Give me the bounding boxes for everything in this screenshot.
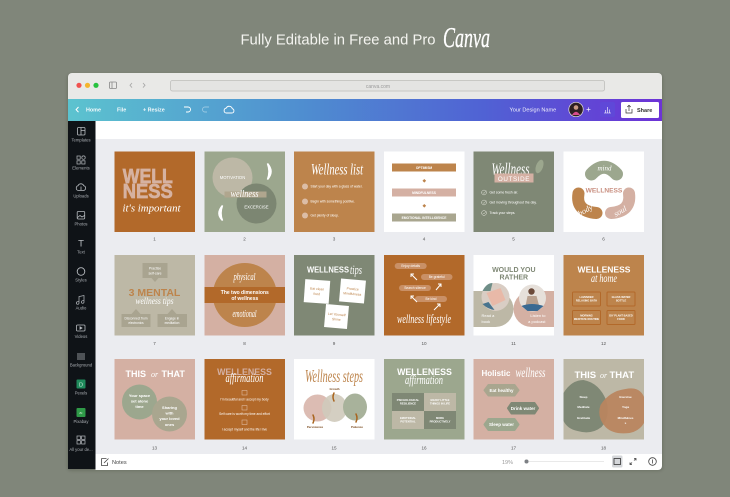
sidebar labels: Background bbox=[70, 362, 93, 368]
heading bbox=[492, 267, 536, 282]
box labels: DIY PLANT BASED bbox=[609, 314, 633, 318]
brown marks bbox=[313, 393, 357, 423]
toolbar labels: Home bbox=[86, 108, 101, 114]
card 18 number: 18 bbox=[601, 446, 606, 450]
center word: WELLNESS bbox=[586, 188, 623, 194]
grid labels: PSICHOLOGICAL bbox=[397, 398, 420, 402]
motivation circle: MOTIVATION bbox=[220, 175, 245, 180]
card 8 number: 8 bbox=[243, 341, 246, 346]
script word: tips bbox=[350, 262, 362, 277]
dot bbox=[422, 204, 426, 208]
toolbar labels: + Resize bbox=[143, 108, 165, 114]
sidebar labels: Templates bbox=[71, 138, 91, 142]
card 9 number: 9 bbox=[333, 341, 336, 346]
circle right: ones bbox=[165, 422, 175, 427]
box labels: RELAXING BATH bbox=[576, 298, 597, 302]
card 16 number: 16 bbox=[421, 446, 427, 450]
icon: styles bbox=[77, 268, 85, 275]
design name: Your Design Name bbox=[510, 108, 556, 114]
body arc: body bbox=[576, 202, 595, 218]
card 7 number: 7 bbox=[153, 341, 156, 346]
left callout: Disconnect from bbox=[124, 316, 148, 320]
heading: THAT bbox=[162, 369, 185, 379]
blob green bbox=[343, 394, 367, 420]
check boxes bbox=[242, 390, 247, 424]
sidebar labels: All your de... bbox=[69, 447, 93, 452]
footer bar bbox=[96, 454, 662, 470]
card 17 number: 17 bbox=[511, 446, 516, 450]
script title: wellness lifestyle bbox=[397, 311, 451, 326]
blob beige bbox=[322, 394, 347, 422]
leaf bbox=[534, 159, 545, 174]
dot bbox=[422, 179, 426, 183]
card 10 number: 10 bbox=[421, 341, 427, 346]
left sidebar bbox=[68, 121, 96, 469]
script line: it's important bbox=[122, 202, 181, 214]
heading: WELLNESS bbox=[307, 266, 350, 274]
grid labels: THINGS IN LIFE bbox=[430, 402, 450, 406]
card 15: wellness steps bbox=[294, 359, 374, 440]
pill labels: Be kind bbox=[426, 297, 437, 301]
right list: Exercise bbox=[619, 395, 632, 399]
book photo bbox=[482, 283, 510, 311]
icon: pixabay: a: bbox=[79, 410, 83, 415]
note 3: Let Yourself bbox=[328, 312, 346, 317]
card 3 number: 3 bbox=[333, 236, 336, 242]
mindfulness bar: MINDFULNESS bbox=[412, 191, 437, 195]
icon: pexels: D bbox=[79, 382, 83, 388]
sidebar labels: Videos bbox=[75, 334, 87, 339]
toolbar labels bbox=[86, 108, 165, 114]
beige shape bbox=[474, 291, 514, 327]
left list: Gratitude bbox=[577, 416, 590, 420]
pill labels: Be grateful bbox=[429, 275, 445, 279]
left list bbox=[577, 395, 590, 420]
right label: a podcast bbox=[528, 319, 546, 324]
card 6: mind body soul bbox=[564, 152, 644, 232]
heading: Holistic bbox=[482, 369, 511, 378]
sidebar labels: Photos bbox=[74, 222, 88, 226]
grid labels: RESILIENCE bbox=[400, 402, 416, 406]
pill labels: Search silence bbox=[404, 286, 426, 290]
pill: eat healthy: Eat healthy bbox=[489, 388, 514, 393]
toolbar labels: File bbox=[117, 108, 126, 114]
icon: photos bbox=[77, 212, 85, 219]
affirmations: I'm beautiful and I accept my body bbox=[220, 398, 269, 402]
card 1 number: 1 bbox=[153, 236, 156, 242]
card 8: two dimensions bbox=[204, 255, 285, 336]
script subheading: wellness tips bbox=[136, 297, 174, 307]
card 10: wellness lifestyle bbox=[384, 255, 464, 336]
card 15 number: 15 bbox=[331, 446, 337, 450]
checklist: Get moving throughout the day. bbox=[490, 201, 537, 205]
checklist bbox=[482, 190, 537, 215]
right callout: meditation bbox=[165, 321, 180, 325]
right list: s bbox=[625, 421, 627, 425]
script title: Wellness steps bbox=[305, 366, 363, 386]
back and forward arrows bbox=[130, 83, 145, 88]
sidebar toggle icon bbox=[110, 82, 116, 88]
sidebar labels bbox=[69, 138, 93, 452]
circle left bbox=[122, 384, 157, 420]
left blob bbox=[564, 380, 608, 432]
exercise circle: EXCERCISE bbox=[244, 204, 269, 210]
card 16: welleness affirmation grid bbox=[384, 359, 464, 440]
note 3 bbox=[324, 304, 349, 329]
card 14 number: 14 bbox=[242, 446, 247, 450]
box labels bbox=[574, 295, 633, 321]
avatar bbox=[569, 102, 583, 117]
card 13: this or that bbox=[114, 359, 195, 440]
right blob bbox=[599, 388, 644, 433]
heading: WELLENESS bbox=[217, 367, 272, 377]
top callout: Practise bbox=[149, 266, 161, 270]
box labels: MORNING bbox=[580, 314, 593, 318]
card 12 number: 12 bbox=[601, 341, 606, 346]
affirmations: I accept myself and the life I live bbox=[222, 428, 267, 432]
soul arc: soul bbox=[612, 204, 629, 219]
white crescents bbox=[219, 164, 271, 220]
cloud save icon bbox=[224, 106, 234, 113]
card 1: wellness it's important bbox=[114, 152, 195, 232]
circle right: with bbox=[164, 410, 174, 416]
boxes bbox=[572, 292, 635, 324]
card 18: this or that venn bbox=[564, 359, 644, 440]
pill labels: Enjoy details bbox=[401, 264, 420, 268]
heading: WELLENESS bbox=[397, 367, 452, 377]
list item 2: Begin with something positive. bbox=[310, 200, 355, 204]
pink shape bbox=[514, 291, 554, 327]
growth label: Growth bbox=[329, 387, 340, 391]
note 2: Mindfulness bbox=[343, 291, 362, 297]
note 1 bbox=[304, 279, 330, 304]
card 6 number: 6 bbox=[602, 236, 605, 242]
grid labels: ENJOY LITTLE bbox=[431, 398, 450, 402]
circle left: set alone bbox=[131, 398, 149, 404]
left callout bbox=[122, 309, 150, 327]
editor window bbox=[68, 73, 662, 470]
heading: 3 MENTAL bbox=[129, 287, 181, 299]
insights button bbox=[600, 102, 615, 117]
grid labels bbox=[397, 398, 451, 424]
band bbox=[204, 287, 285, 303]
top callout: self-care bbox=[148, 272, 162, 276]
right callout: Engage in bbox=[165, 316, 179, 320]
card 2: motivation exercise bbox=[204, 152, 285, 232]
address bar bbox=[170, 80, 604, 91]
grid bbox=[392, 393, 456, 429]
band: The two dimensions bbox=[221, 290, 269, 296]
grid labels: PRODUCTIVELY bbox=[430, 420, 451, 424]
right list: Mindfulnes bbox=[618, 416, 634, 420]
address bar: canva.com bbox=[366, 84, 390, 90]
notes label: Notes bbox=[112, 460, 127, 466]
icon: pixabay bbox=[76, 408, 86, 417]
box labels: FOOD bbox=[617, 317, 625, 321]
checklist: Track your steps. bbox=[490, 211, 515, 215]
fullscreen icon bbox=[630, 458, 636, 464]
right list bbox=[618, 395, 634, 425]
checklist: Get some fresh air. bbox=[490, 191, 518, 195]
note 1: Eat clean bbox=[310, 287, 324, 292]
card 4: three bars bbox=[384, 152, 464, 232]
canvas background bbox=[95, 139, 662, 454]
band: of wellness bbox=[231, 296, 258, 302]
script word: at home bbox=[591, 271, 617, 285]
heading: WOULD YOU bbox=[492, 267, 536, 274]
pill: sleep water: Sleep water bbox=[489, 422, 514, 427]
list item 1: Start your day with a glass of water. bbox=[310, 185, 363, 189]
heading: THIS bbox=[574, 370, 596, 381]
note 2: Practice bbox=[346, 286, 359, 292]
right list: Yoga bbox=[622, 405, 629, 409]
circle right bbox=[152, 396, 187, 432]
list item 3: Get plenty of sleep. bbox=[310, 214, 339, 218]
grid labels: POTENTIAL bbox=[400, 420, 416, 424]
headline: Canva bbox=[443, 22, 490, 54]
sidebar labels: Elements bbox=[72, 166, 90, 170]
icon: videos bbox=[76, 325, 85, 331]
heading: WELLENESS bbox=[578, 264, 631, 274]
card 13 number: 13 bbox=[152, 446, 157, 450]
heading bbox=[126, 369, 185, 379]
or script: or bbox=[600, 371, 608, 380]
zoom percent: 19% bbox=[502, 460, 513, 466]
left label bbox=[482, 313, 495, 324]
share button: Share bbox=[637, 108, 652, 114]
icon: audio bbox=[76, 296, 84, 304]
window shadow bbox=[67, 74, 663, 471]
card 5 number: 5 bbox=[512, 236, 515, 242]
circle left: time bbox=[135, 404, 144, 409]
left label: Read a bbox=[482, 313, 495, 318]
circle left: Your space bbox=[129, 393, 151, 398]
sidebar labels: Uploads bbox=[73, 194, 89, 198]
grid labels: EMOTIONAL bbox=[400, 416, 416, 420]
right label: Listen to bbox=[530, 313, 546, 318]
left label: book bbox=[482, 319, 490, 324]
card 5: wellness outside bbox=[474, 152, 554, 232]
pill labels bbox=[401, 264, 445, 301]
big word bbox=[123, 166, 173, 203]
script title: Wellness list bbox=[311, 162, 363, 178]
arrows bbox=[411, 274, 441, 310]
blob pink bbox=[304, 394, 332, 422]
emotional script: emotional bbox=[232, 308, 256, 320]
circle right: your loved bbox=[159, 416, 180, 421]
share button bbox=[621, 102, 659, 118]
persistence label: Persistence bbox=[307, 425, 324, 429]
script word: wellness bbox=[230, 188, 258, 200]
toolbar bbox=[68, 99, 662, 121]
card 11: would you rather bbox=[474, 255, 554, 336]
brush stroke bbox=[224, 192, 266, 198]
grid view button bbox=[612, 456, 622, 468]
sidebar labels: Pixabay bbox=[74, 419, 89, 424]
affirmations: Self care is worth my time and effort bbox=[219, 412, 270, 416]
box labels: LAVENDER bbox=[579, 295, 594, 299]
icon: elements bbox=[77, 156, 85, 164]
right label bbox=[528, 313, 546, 324]
card 17: holistic wellness bbox=[474, 359, 554, 440]
card 12: welleness at home bbox=[564, 255, 644, 336]
box labels: GLASS WATER bbox=[612, 295, 631, 299]
notes icon bbox=[102, 458, 108, 466]
left list: Meditate bbox=[577, 405, 590, 409]
note 2 bbox=[339, 278, 366, 304]
big word: WELL bbox=[123, 166, 173, 188]
card 14: welleness affirmation bbox=[204, 359, 285, 440]
headline: Fully Editable in Free and Pro bbox=[240, 32, 436, 48]
icon: pexels bbox=[76, 380, 86, 388]
right callout bbox=[158, 309, 187, 327]
mind arc: mind bbox=[598, 164, 612, 172]
heading: THAT bbox=[610, 370, 634, 381]
card 2 number: 2 bbox=[243, 236, 246, 242]
affirmations bbox=[219, 398, 270, 432]
browser chrome bbox=[68, 73, 662, 99]
outside label: OUTSIDE bbox=[498, 176, 530, 183]
heading: THIS bbox=[126, 369, 146, 379]
sidebar labels: Text bbox=[77, 250, 86, 254]
script word: affirmation bbox=[226, 370, 264, 385]
patience label: Patience bbox=[351, 425, 363, 429]
emotional intelligence bar: EMOTIONAL INTELLIGENCE bbox=[402, 216, 447, 220]
help icon bbox=[649, 458, 656, 465]
or script: or bbox=[151, 370, 159, 379]
undo redo icons bbox=[184, 107, 209, 112]
note 3: Shine bbox=[332, 317, 341, 322]
white header strip bbox=[95, 121, 662, 139]
script word: wellness bbox=[516, 366, 546, 381]
top callout bbox=[142, 263, 168, 282]
icon: uploads bbox=[76, 184, 86, 190]
box labels: MEDITATE ROUTINE bbox=[574, 317, 599, 321]
back chevron bbox=[76, 107, 78, 112]
script title: Wellness bbox=[492, 160, 530, 178]
optimism bar: OPTIMISM bbox=[416, 166, 432, 170]
zoom slider bbox=[524, 460, 604, 464]
left list: Sleep bbox=[579, 395, 588, 399]
circle right: Sharing bbox=[162, 405, 178, 410]
card 7: 3 mental wellness tips bbox=[114, 255, 195, 336]
card 3: wellness list bbox=[294, 152, 374, 232]
note 1: food bbox=[313, 292, 320, 296]
box labels: BOTTLE bbox=[616, 298, 626, 302]
circle bbox=[213, 263, 277, 327]
icon: templates bbox=[78, 128, 85, 135]
physical script: physical bbox=[233, 271, 256, 283]
card 4 number: 4 bbox=[423, 236, 426, 242]
grid labels: MORE bbox=[436, 416, 444, 420]
sidebar labels: Styles bbox=[75, 278, 87, 282]
add member plus: + bbox=[586, 105, 591, 114]
card 9: wellness tips notes bbox=[294, 255, 374, 336]
script word: affirmation bbox=[405, 372, 443, 387]
laptop photo bbox=[519, 284, 546, 312]
traffic lights bbox=[76, 83, 99, 88]
icon: all your designs bbox=[77, 436, 85, 444]
icon: text: T bbox=[78, 238, 84, 250]
pill: drink water: Drink water bbox=[511, 406, 535, 411]
pills bbox=[395, 263, 452, 302]
left callout: electronics bbox=[128, 321, 144, 325]
heading: RATHER bbox=[499, 274, 528, 282]
sidebar labels: Audio bbox=[76, 306, 87, 310]
sidebar labels: Pexels bbox=[75, 390, 87, 396]
card 11 number: 11 bbox=[511, 341, 516, 346]
big word: NESS bbox=[123, 181, 173, 203]
icon: background bbox=[77, 353, 85, 360]
headline bbox=[240, 22, 490, 54]
heading bbox=[574, 370, 634, 381]
